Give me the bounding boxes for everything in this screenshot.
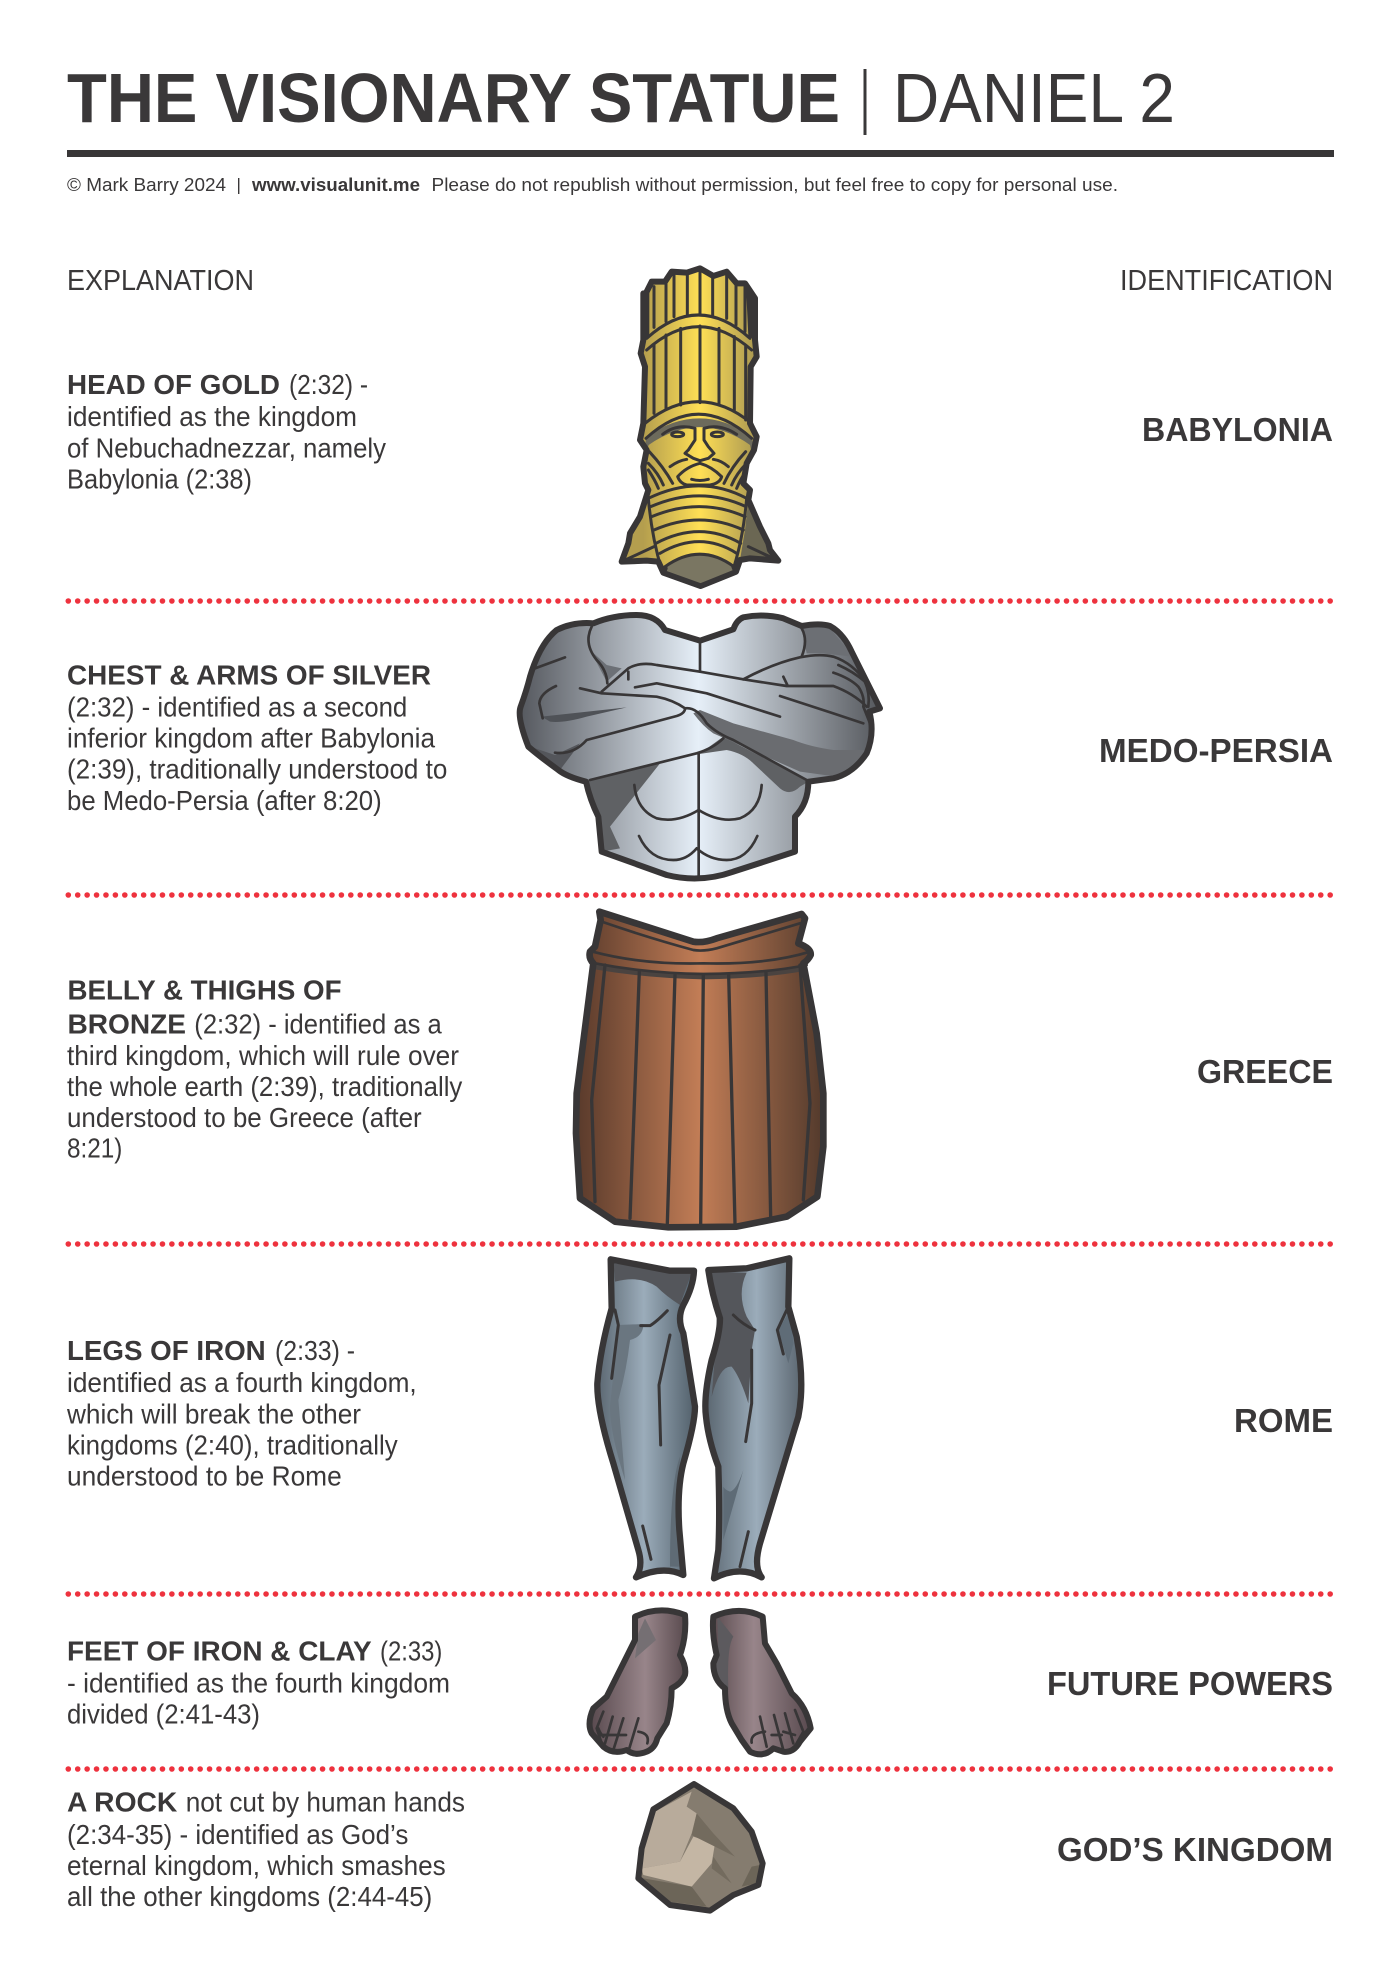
- copyright line: www.visualunit.me: [251, 175, 420, 195]
- text: chest and arms of silver: inferior kingdom after Babylonia: [67, 723, 436, 754]
- text: belly and thighs of bronze: BELLY & THIGHS OF: [68, 974, 342, 1005]
- text: belly and thighs of bronze: BRONZE: [68, 1008, 186, 1039]
- dotted dividers: [68, 601, 1333, 1769]
- copyright line: [67, 175, 1118, 195]
- right leg: [705, 1258, 801, 1578]
- text: feet of iron and clay: [67, 1636, 450, 1730]
- label: Medo-Persia: MEDO-PERSIA: [1099, 733, 1333, 770]
- text: head of gold: HEAD OF GOLD: [67, 369, 280, 400]
- icon: legs of iron: [597, 1258, 801, 1578]
- text: legs of iron: understood to be Rome: [67, 1461, 342, 1492]
- text: legs of iron: [66, 1335, 417, 1492]
- icon: rock: [638, 1784, 763, 1911]
- label: future powers: FUTURE POWERS: [1047, 1666, 1333, 1703]
- text: chest and arms of silver: (2:32) - identified as a second: [67, 692, 407, 723]
- text: head of gold: of Nebuchadnezzar, namely: [67, 432, 386, 464]
- label: Greece: GREECE: [1197, 1054, 1333, 1091]
- left leg: [597, 1259, 695, 1577]
- text: feet of iron and clay: divided (2:41-43): [67, 1699, 260, 1730]
- text: legs of iron: identified as a fourth kingdom,: [67, 1367, 417, 1398]
- text: a rock: not cut by human hands: [186, 1787, 465, 1818]
- text: chest and arms of silver: CHEST & ARMS OF SILVER: [67, 660, 431, 690]
- column heading: identification: IDENTIFICATION: [1120, 265, 1333, 297]
- text: a rock: A ROCK: [67, 1787, 177, 1818]
- text: a rock: (2:34-35) - identified as God’s: [67, 1819, 408, 1850]
- label: Rome: ROME: [1234, 1403, 1333, 1440]
- icon: head of gold: [622, 268, 778, 586]
- text: legs of iron: which will break the other: [66, 1398, 361, 1430]
- copyright line: © Mark Barry 2024: [67, 175, 226, 195]
- title: DANIEL 2: [893, 59, 1175, 137]
- text: belly and thighs of bronze: 8:21): [67, 1133, 122, 1164]
- text: head of gold: Babylonia (2:38): [67, 464, 252, 494]
- icon: feet of iron and clay: [590, 1610, 811, 1754]
- icon: chest and arms of silver: [520, 615, 880, 878]
- label: Babylonia: BABYLONIA: [1142, 412, 1333, 449]
- text: head of gold: (2:32) -: [289, 369, 368, 400]
- text: chest and arms of silver: be Medo-Persia (after 8:20): [67, 785, 382, 816]
- text: legs of iron: (2:33) -: [275, 1335, 355, 1366]
- copyright line: Please do not republish without permission, but feel free to copy for personal use.: [432, 175, 1118, 195]
- text: feet of iron and clay: (2:33): [380, 1636, 442, 1667]
- label: God's kingdom: GOD’S KINGDOM: [1057, 1832, 1333, 1869]
- text: belly and thighs of bronze: understood to be Greece (after: [67, 1102, 422, 1133]
- text: belly and thighs of bronze: the whole earth (2:39), traditionally: [67, 1071, 462, 1102]
- text: belly and thighs of bronze: (2:32) - identified as a: [194, 1008, 442, 1039]
- text: chest and arms of silver: (2:39), traditionally understood to: [67, 754, 447, 785]
- text: chest and arms of silver: [67, 660, 447, 816]
- text: a rock: all the other kingdoms (2:44-45): [67, 1881, 432, 1912]
- text: head of gold: identified as the kingdom: [67, 401, 357, 432]
- text: a rock: eternal kingdom, which smashes: [67, 1850, 446, 1881]
- text: legs of iron: kingdoms (2:40), traditionally: [67, 1430, 398, 1460]
- text: a rock: [67, 1787, 465, 1912]
- text: belly and thighs of bronze: [67, 974, 462, 1164]
- icon: belly and thighs of bronze: [576, 912, 823, 1227]
- title: THE VISIONARY STATUE: [67, 59, 840, 137]
- text: feet of iron and clay: FEET OF IRON & CLAY: [67, 1636, 372, 1667]
- text: head of gold: [67, 369, 386, 494]
- header rule: [67, 150, 1334, 157]
- text: feet of iron and clay: - identified as the fourth kingdom: [67, 1668, 450, 1699]
- text: belly and thighs of bronze: third kingdom, which will rule over: [67, 1040, 459, 1071]
- text: legs of iron: LEGS OF IRON: [67, 1335, 266, 1366]
- column heading: explanation: EXPLANATION: [67, 265, 254, 297]
